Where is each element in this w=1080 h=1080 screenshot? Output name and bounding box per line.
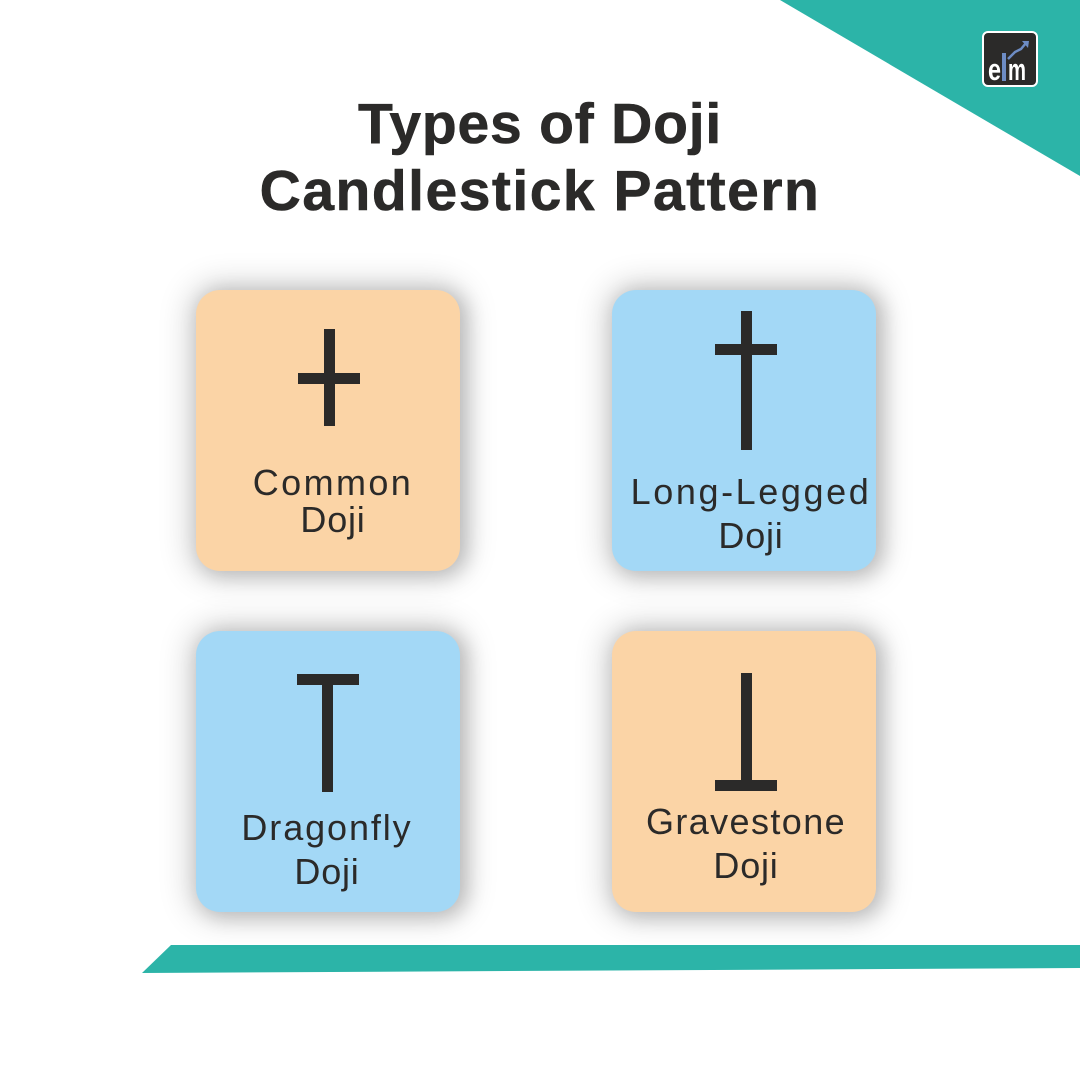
panel: Gravestone Doji	[612, 631, 876, 912]
panel: Dragonfly Doji	[196, 631, 460, 912]
label: Gravestone Doji: Gravestone	[646, 801, 846, 842]
label: Gravestone Doji: Doji	[713, 845, 779, 886]
label: Common Doji	[253, 462, 413, 540]
icon: elm logo	[982, 31, 1038, 87]
icon: dragonfly doji candlestick	[297, 674, 359, 792]
icon: elm logo: e	[988, 52, 1001, 87]
label: Long-Legged Doji: Doji	[718, 515, 784, 556]
icon: long-legged doji candlestick	[715, 311, 777, 450]
icon: gravestone doji candlestick	[715, 673, 777, 791]
label: Dragonfly Doji: Dragonfly	[241, 807, 413, 848]
label: Long-Legged Doji	[631, 471, 871, 556]
label: Gravestone Doji	[646, 801, 846, 886]
bottom teal ribbon	[142, 945, 1080, 973]
panel: Common Doji	[196, 290, 460, 571]
label: Dragonfly Doji: Doji	[294, 851, 360, 892]
label: Common Doji: Doji	[300, 499, 366, 540]
title: Candlestick Pattern	[260, 159, 820, 223]
label: Dragonfly Doji	[241, 807, 413, 892]
icon: common doji candlestick	[298, 329, 360, 426]
top-right teal corner triangle	[780, 0, 1080, 176]
title: Types of Doji	[358, 92, 722, 156]
title	[260, 92, 820, 223]
label: Long-Legged Doji: Long-Legged	[631, 471, 871, 512]
label: Common Doji: Common	[253, 462, 413, 503]
icon: elm logo: m	[1008, 52, 1026, 87]
panel: Long-Legged Doji	[612, 290, 876, 571]
